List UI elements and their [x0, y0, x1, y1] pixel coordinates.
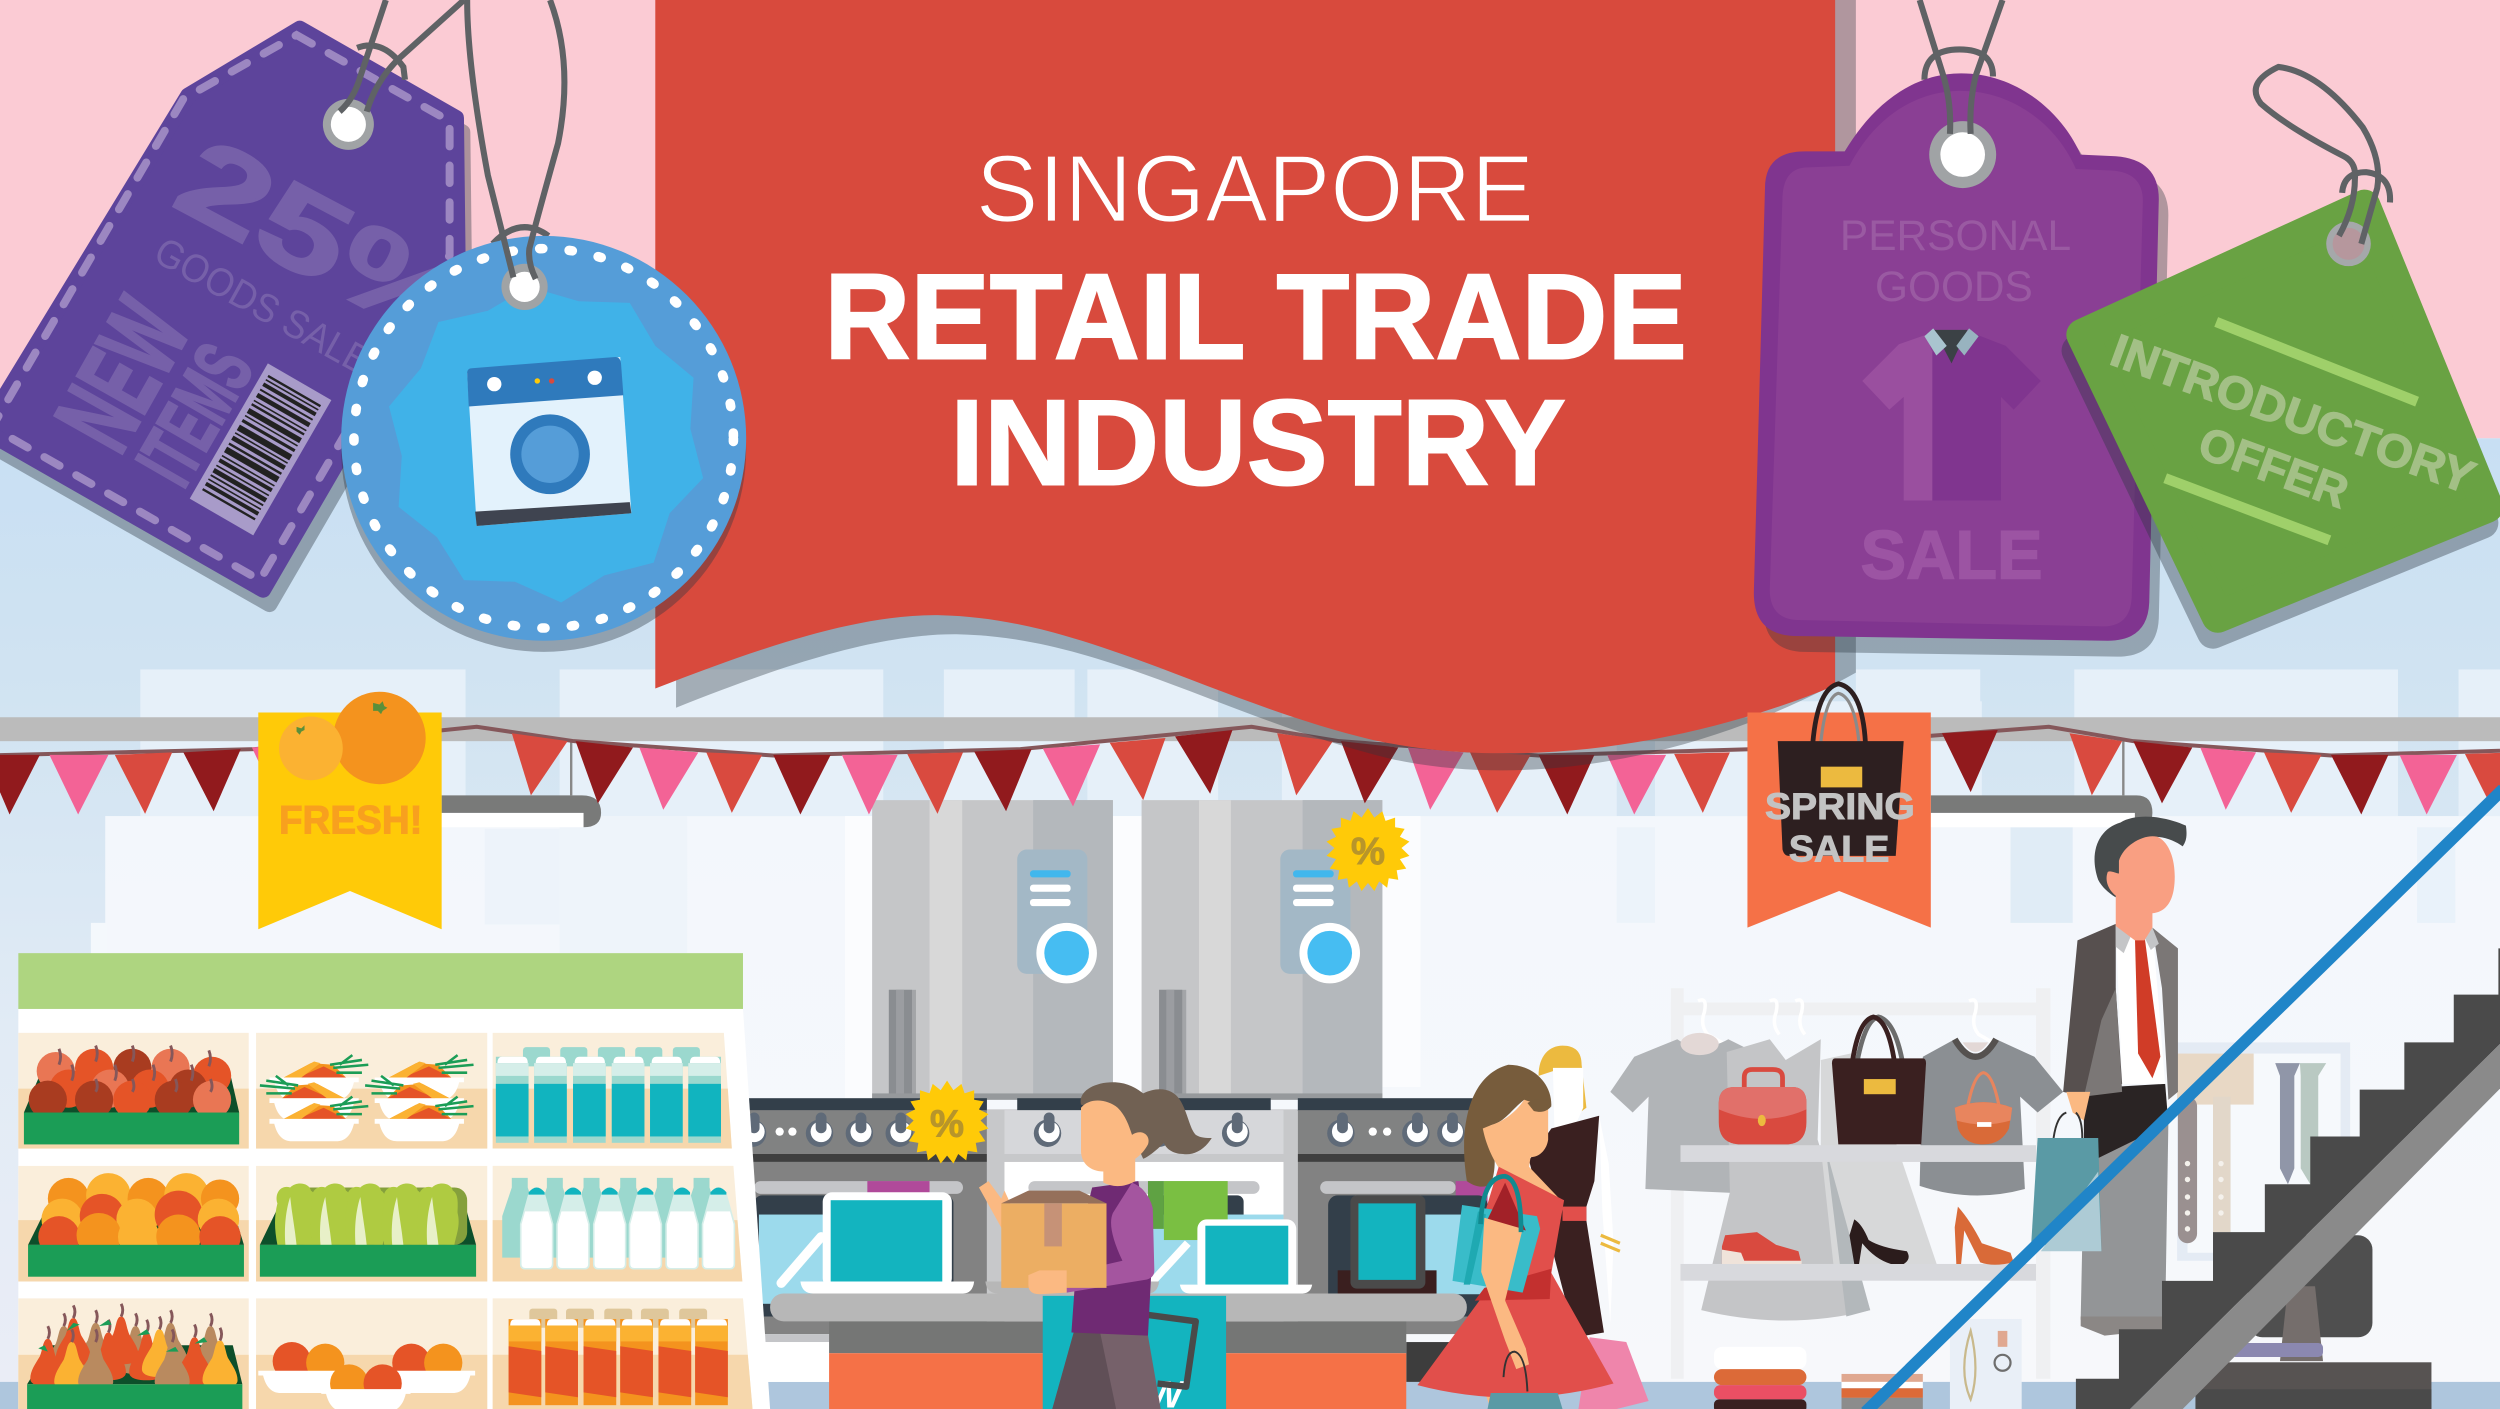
red handbag — [1719, 1070, 1806, 1144]
grommet — [501, 264, 548, 310]
background: blue store wall — [0, 438, 2500, 1387]
red title banner — [655, 0, 1835, 753]
icon: black shopping bag — [1778, 684, 1904, 856]
green tag: introductory offer — [2082, 67, 2487, 617]
orange sign: spring sale: SALE — [1789, 829, 1889, 869]
barcode — [190, 363, 331, 535]
woman carrying box — [979, 1082, 1212, 1409]
blue round tag: washing machine — [341, 0, 746, 641]
laptop base middle — [985, 1281, 1159, 1293]
oven middle — [987, 1098, 1298, 1342]
string — [2256, 67, 2378, 244]
cardboard box — [1001, 1191, 1107, 1288]
tablet on stand — [1338, 1195, 1437, 1294]
shopping bag held by man — [2031, 1113, 2101, 1251]
clothes rack — [1671, 988, 2050, 1379]
purple discount tag shadow — [0, 43, 464, 604]
orange sign: spring sale — [1747, 684, 1931, 928]
left ceiling lamp — [442, 741, 601, 827]
purple tag: personal goods sale: GOODS — [1875, 263, 2033, 311]
carrots in bowls — [260, 1055, 474, 1141]
black high heel — [1849, 1219, 1909, 1264]
folded clothes pile — [1714, 1347, 1806, 1409]
black tote bag — [1832, 1017, 1926, 1144]
grey t-shirt — [1610, 1033, 1754, 1194]
jewelry display — [1950, 1319, 2022, 1409]
pears crate — [27, 1304, 242, 1409]
purple tag: 25% goods sale: NEW — [32, 280, 213, 469]
purple tag: personal goods sale: SALE — [1861, 517, 2042, 594]
orange handbag — [1955, 1073, 2012, 1144]
shelf back panels — [18, 1033, 753, 1409]
refrigerator right — [1142, 800, 1382, 1100]
staircase — [2076, 948, 2500, 1409]
purple tag shadow — [1763, 89, 2168, 657]
title: RETAIL TRADE — [824, 249, 1687, 385]
title: SINGAPORE — [976, 136, 1534, 243]
purple tag: 25% goods sale: ITEMS — [118, 329, 271, 500]
round tag shadow — [341, 247, 746, 652]
belts and ties rack — [2177, 1042, 2350, 1261]
string — [340, 0, 464, 112]
grey dress — [1701, 1039, 1937, 1321]
mannequin — [1529, 1046, 1620, 1337]
purple tag: 25% goods sale: 25% — [157, 113, 499, 376]
teal juice cartons — [496, 1047, 721, 1143]
bunting left — [0, 727, 2500, 814]
ceiling beam — [0, 717, 2500, 741]
apples crate — [24, 1046, 239, 1144]
fridge base strip — [872, 1093, 1382, 1100]
lower cabinet strip — [765, 1342, 1470, 1382]
title: INDUSTRY — [950, 375, 1566, 511]
orange sign: spring sale: SPRING — [1765, 786, 1915, 827]
man in suit — [2031, 817, 2187, 1336]
oven right — [1298, 1098, 1488, 1334]
oranges crate — [28, 1173, 244, 1277]
purple tag: personal goods sale — [1754, 0, 2159, 641]
escalator handrail — [1865, 789, 2500, 1409]
pink shopping bag — [1578, 1337, 1649, 1409]
purple tag: 25% goods sale — [0, 0, 499, 590]
background: lower store wall — [91, 816, 2500, 1382]
grommet — [1929, 121, 1996, 188]
icon: oranges — [279, 692, 426, 784]
right ceiling lamp — [1931, 741, 2152, 827]
string — [1920, 0, 2003, 134]
teal backpack — [1452, 1205, 1540, 1293]
grommet — [323, 99, 374, 150]
red sneaker — [1722, 1232, 1802, 1264]
background: upper windows — [140, 669, 2500, 816]
title — [824, 136, 1687, 511]
laptop right — [1180, 1219, 1312, 1293]
floor — [0, 1382, 2500, 1409]
purple tag: 25% goods sale: GOODS SALE — [147, 229, 378, 384]
lettuce crate — [260, 1184, 476, 1277]
discount burst on oven — [906, 1081, 989, 1164]
green tag: introductory offer: OFFER — [2192, 416, 2355, 518]
icon: t-shirt — [1862, 328, 2041, 500]
purple tag: personal goods sale: PERSONAL — [1840, 212, 2071, 260]
trousers — [2084, 1084, 2168, 1167]
teal shopping bag — [1488, 1352, 1562, 1409]
banner shadow — [676, 0, 1856, 770]
discount burst on fridge — [1327, 808, 1409, 891]
discount burst on oven: % — [930, 1102, 964, 1145]
laptop left — [800, 1192, 974, 1293]
grommet — [2326, 222, 2371, 266]
background: pink upper wall — [0, 0, 2500, 438]
string — [467, 0, 564, 279]
orange high heel — [1955, 1207, 2014, 1265]
milk bottles — [502, 1178, 734, 1269]
yellow sign: fresh — [258, 692, 442, 929]
shopping basket — [1148, 1315, 1196, 1387]
icon: washing machine — [467, 357, 631, 526]
orange juice cartons — [509, 1309, 728, 1405]
oven left — [739, 1098, 987, 1342]
second clothes pile — [1842, 1374, 1923, 1409]
lower shelf — [1680, 1264, 2036, 1281]
produce shelf unit — [18, 953, 770, 1409]
green tag: introductory offer: INTRODUCTORY — [2104, 324, 2482, 504]
woman in red dress — [1417, 1065, 1614, 1409]
refrigerator left — [872, 800, 1113, 1100]
green tag shadow — [2077, 222, 2482, 633]
sales counter — [770, 1293, 1467, 1409]
oranges in bowls — [258, 1342, 475, 1409]
yellow sign: fresh: FRESH! — [279, 799, 423, 843]
dark t-shirt — [1920, 1039, 2063, 1195]
cash register — [2195, 1235, 2431, 1409]
discount burst on fridge: % — [1351, 830, 1385, 873]
upper shelf — [1680, 1145, 2036, 1162]
